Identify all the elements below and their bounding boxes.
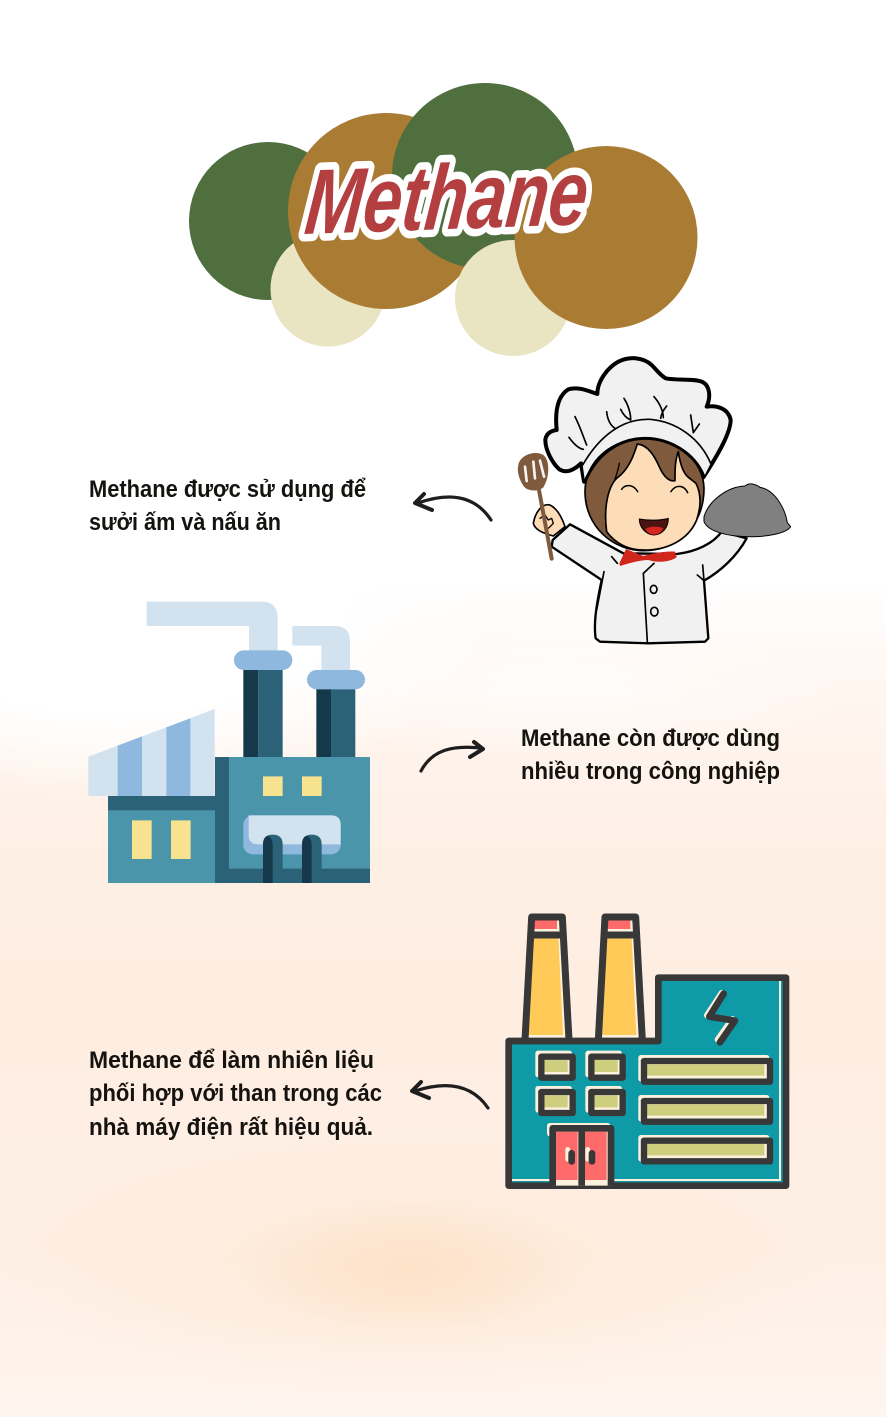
chimneys	[525, 917, 642, 1040]
text: power plants: nhà máy điện rất hiệu quả.	[89, 1114, 373, 1141]
text: industry use: Methane còn được dùng	[521, 725, 780, 752]
icon: chef	[518, 358, 791, 643]
circle: ochre right	[514, 146, 698, 329]
circle: dark green left	[189, 142, 347, 300]
title group: brush circles with Methane lettering	[189, 83, 698, 356]
hat	[545, 358, 731, 482]
arrow: chef to text	[415, 494, 491, 520]
title: Methane	[301, 140, 594, 254]
hat creases	[569, 397, 711, 465]
icon: power plant	[509, 917, 786, 1186]
hair strand	[615, 463, 619, 479]
text: heating and cooking: Methane được sử dụng để	[89, 476, 366, 503]
text: power plants	[89, 1047, 382, 1141]
lightning bolt	[707, 993, 735, 1042]
arrow: factory to text	[421, 742, 483, 771]
spatula	[518, 453, 548, 491]
text: industry use	[521, 725, 780, 785]
cloche	[704, 484, 791, 537]
pipes	[263, 835, 322, 883]
tank	[243, 815, 341, 854]
eyes	[622, 486, 688, 493]
jacket	[552, 524, 747, 643]
head: hair	[585, 438, 704, 551]
spatula handle	[539, 490, 552, 559]
smoke	[147, 602, 350, 672]
circle: ochre left	[288, 113, 484, 309]
buttons	[650, 585, 658, 616]
jacket details	[597, 557, 704, 642]
circle: cream right	[455, 240, 571, 356]
buildings	[108, 757, 370, 883]
hat brim line	[585, 438, 704, 482]
mouth	[639, 518, 668, 535]
text: industry use: nhiều trong công nghiệp	[521, 758, 780, 785]
roof	[88, 709, 215, 796]
windows	[535, 1051, 770, 1162]
text: power plants: phối hợp với than trong các	[89, 1080, 382, 1107]
text: power plants: Methane để làm nhiên liệu	[89, 1047, 374, 1074]
chimneys	[234, 650, 365, 758]
circle: dark green top	[392, 83, 578, 269]
building	[509, 978, 786, 1186]
text: heating and cooking: sưởi ấm và nấu ăn	[89, 509, 281, 536]
arrow: power plant to text	[412, 1082, 488, 1108]
door	[553, 1128, 611, 1186]
windows	[132, 776, 322, 859]
text: heating and cooking	[89, 476, 366, 536]
hand	[533, 505, 565, 536]
hat band	[583, 419, 711, 482]
head: face	[606, 444, 700, 550]
icon: blue factory	[88, 602, 370, 883]
circle: cream left	[270, 232, 386, 346]
bow tie	[619, 549, 677, 566]
